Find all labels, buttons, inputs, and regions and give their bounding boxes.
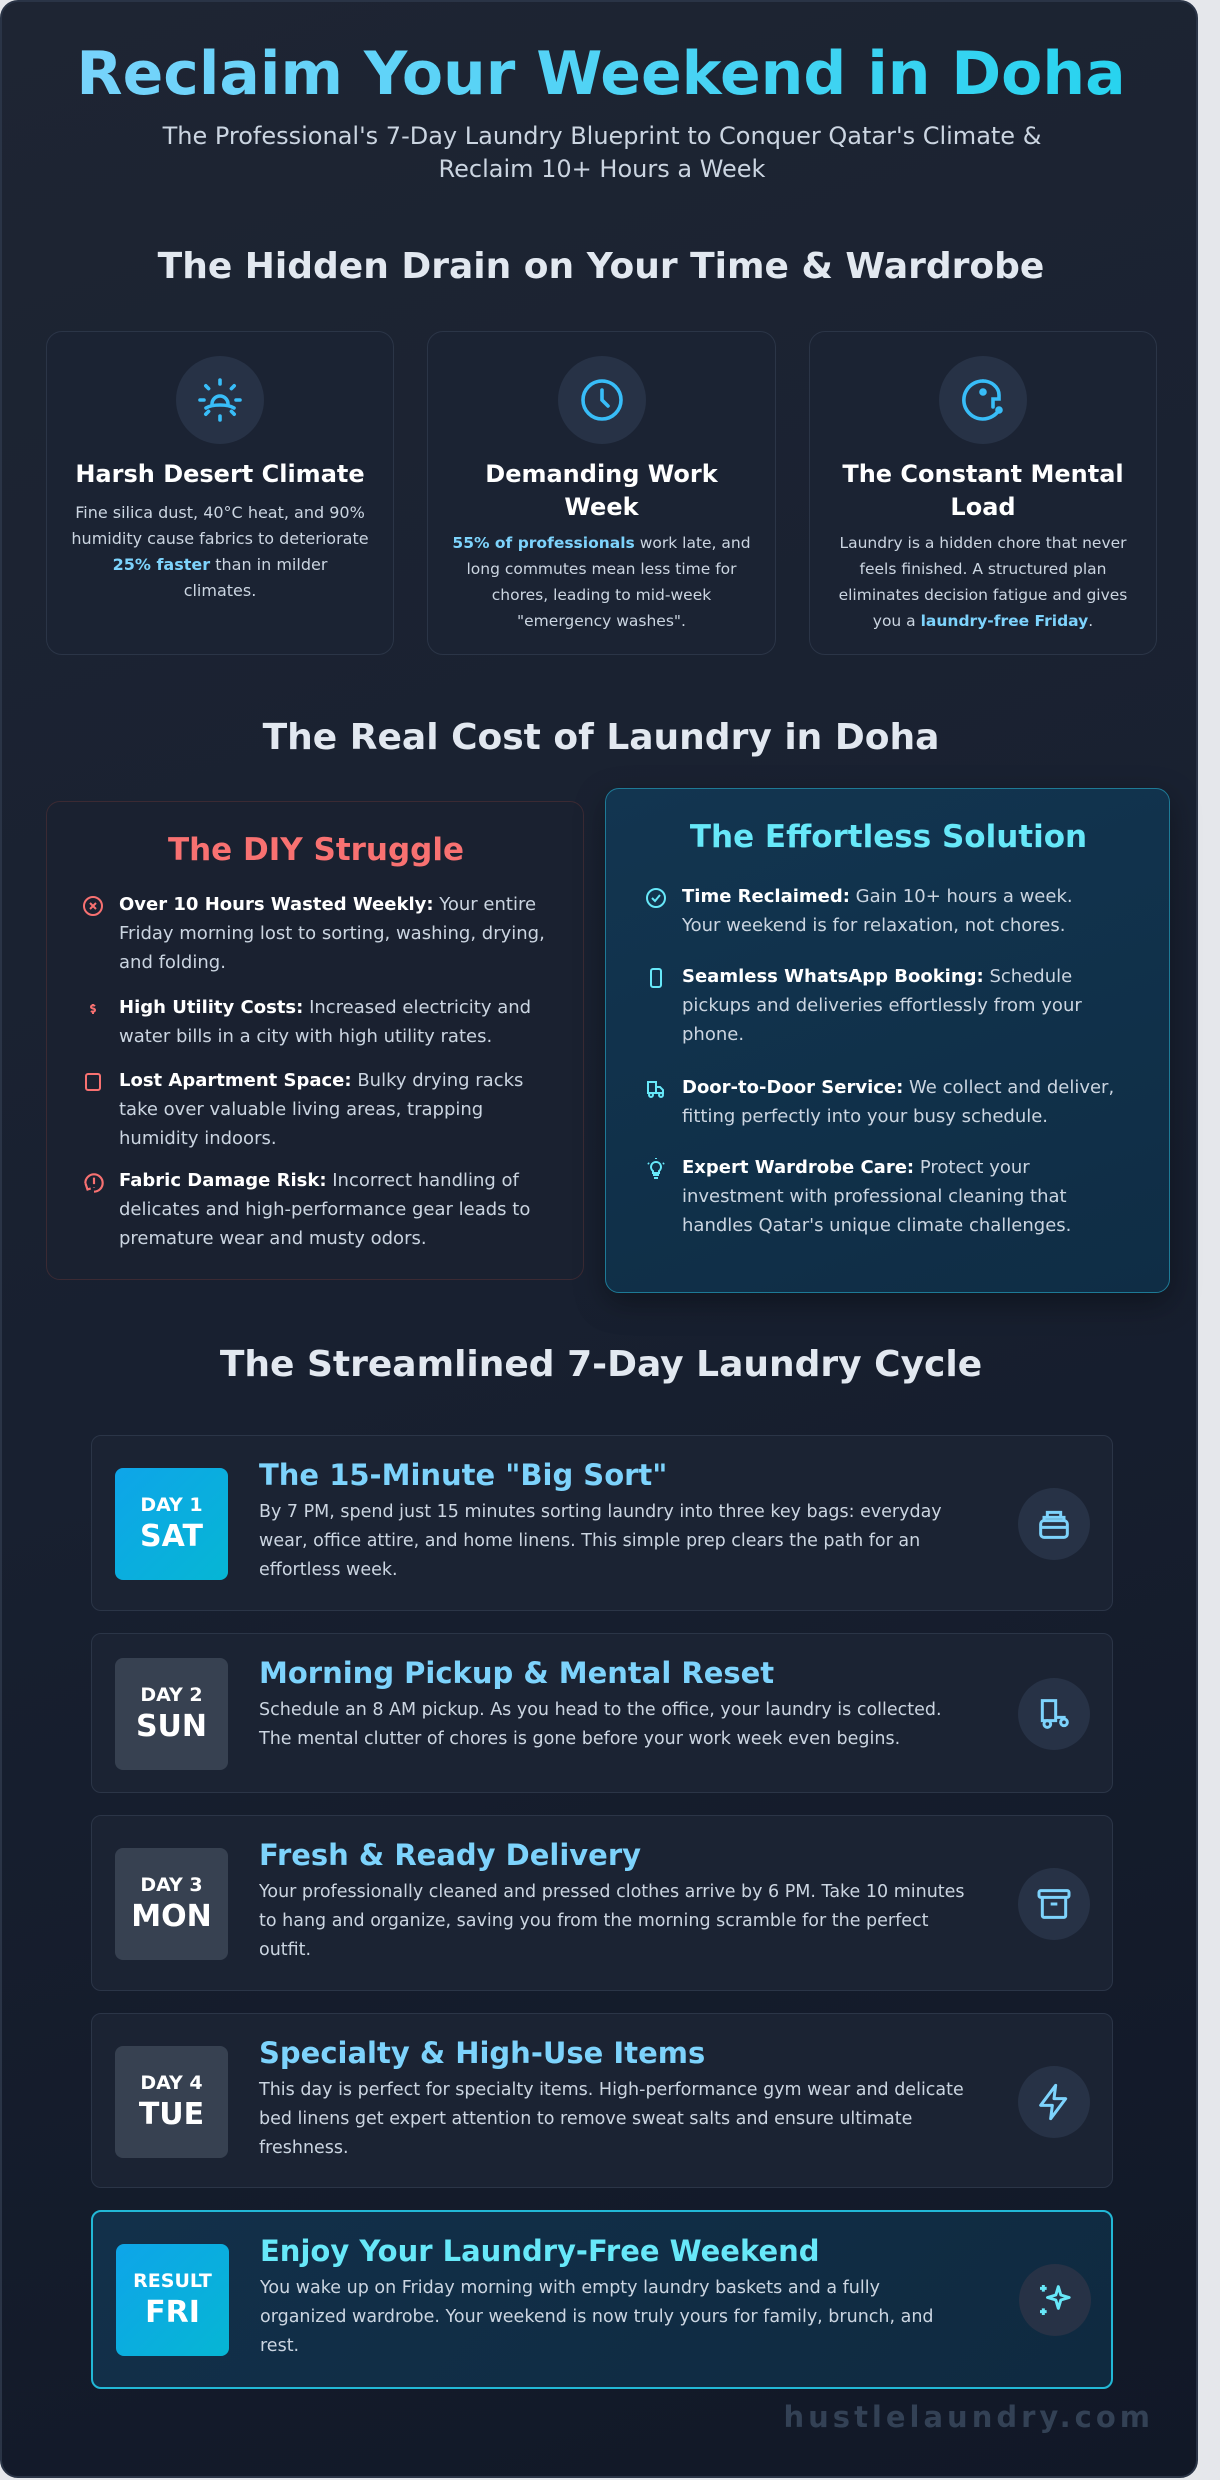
panel: effortless solution [605,788,1170,1293]
badge: SAT [140,1519,203,1554]
heading: hidden drain: The Hidden Drain on Your Time & Wardrobe [158,246,1044,287]
card: demanding work week [427,331,776,655]
day text: Your professionally cleaned and pressed clothes arrive by 6 PM. Take 10 minutes to hang and organize, saving you from the morning scramble for the perfect outfit. [259,1882,965,1960]
day title: The 15-Minute "Big Sort" [259,1458,667,1492]
card text: Fine silica dust, 40°C heat, and 90% humidity cause fabrics to deteriorate 25% faster than in milder [71,503,369,574]
item: whatsapp booking: Seamless WhatsApp Booking: Schedule pickups and deliveries effortlessly from your phone. [682,966,1082,1045]
badge [115,2046,228,2158]
card: mental load [809,331,1157,655]
icon: sparkles [1019,2264,1091,2336]
icon: archive [1018,1868,1090,1940]
icon: truck [1018,1678,1090,1750]
day card: day 4 [91,2013,1113,2188]
item: lost space: Lost Apartment Space: Bulky drying racks take over valuable living areas, trapping humidity indoors. [119,1070,523,1149]
day text: By 7 PM, spend just 15 minutes sorting laundry into three key bags: everyday wear, office attire, and home linens. This simple prep clears the path for an effortless week. [259,1502,942,1580]
day text: You wake up on Friday morning with empty laundry baskets and a fully organized wardrobe. Your weekend is now truly yours for family, brunch, and rest. [260,2278,934,2356]
item: utility costs: High Utility Costs: Increased electricity and water bills in a city with high utility rates. [119,997,531,1047]
item: time reclaimed: Time Reclaimed: Gain 10+ hours a week. Your weekend is for relaxation, not chores. [682,886,1073,936]
badge [115,1658,228,1770]
badge: TUE [139,2097,204,2132]
icon: brain [939,356,1027,444]
badge: DAY 1 [140,1494,203,1516]
day title: Enjoy Your Laundry-Free Weekend [260,2234,820,2268]
badge: RESULT [133,2270,212,2292]
panel: DIY struggle [46,801,584,1280]
day text: This day is perfect for specialty items. High-performance gym wear and delicate bed linens get expert attention to remove sweat salts and ensure ultimate freshness. [259,2080,964,2158]
badge: DAY 2 [140,1684,203,1706]
heading: real cost: The Real Cost of Laundry in Doha [263,717,939,758]
badge [115,1468,228,1580]
icon: clock [558,356,646,444]
card text: Laundry is a hidden chore that never feels finished. A structured plan eliminates decision fatigue and gives you a laundry-free Friday. [839,534,1127,630]
heading: 7-day cycle: The Streamlined 7-Day Laundry Cycle [220,1344,982,1385]
card title: Harsh Desert Climate [75,460,365,488]
DIY title: The DIY Struggle [168,832,464,868]
icon: stack [1018,1488,1090,1560]
day card: day 1 [91,1435,1113,1611]
item: wardrobe care: Expert Wardrobe Care: Protect your investment with professional cleaning that handles Qatar's unique climate challenges. [682,1157,1071,1236]
day card: result friday [91,2210,1113,2389]
icon: sun [176,356,264,444]
icon: bolt [1018,2066,1090,2138]
card text: 55% of professionals work late, and long commutes mean less time for chores, leading to mid-week "emergency washes". [452,534,751,630]
badge: DAY 4 [140,2072,203,2094]
day title: Specialty & High-Use Items [259,2036,705,2070]
card text: climates. [184,581,256,600]
card title: Demanding Work Week [485,460,718,521]
badge: SUN [136,1709,207,1744]
badge: MON [131,1899,212,1934]
subtitle: The Professional's 7-Day Laundry Blueprint to Conquer Qatar's Climate & Reclaim 10+ Hours a Week [163,122,1041,183]
day card: day 2 [91,1633,1113,1793]
footer brand: hustlelaundry.com [784,2400,1154,2434]
item: hours wasted: Over 10 Hours Wasted Weekly: Your entire Friday morning lost to sorting, washing, drying, and folding. [119,894,545,973]
day text: Schedule an 8 AM pickup. As you head to the office, your laundry is collected. The mental clutter of chores is gone before your work week even begins. [259,1700,942,1749]
card title: The Constant Mental Load [842,460,1124,521]
badge [116,2244,229,2356]
day card: day 3 [91,1815,1113,1991]
day title: Fresh & Ready Delivery [259,1838,641,1872]
title: Reclaim Your Weekend in Doha [76,39,1126,109]
badge [115,1848,228,1960]
solution title: The Effortless Solution [690,819,1087,855]
card: harsh desert climate [46,331,394,655]
item: fabric damage: Fabric Damage Risk: Incorrect handling of delicates and high-performance gear leads to premature wear and musty odors. [119,1170,530,1249]
badge: FRI [145,2295,200,2330]
badge: DAY 3 [140,1874,203,1896]
day title: Morning Pickup & Mental Reset [259,1656,774,1690]
item: door-to-door: Door-to-Door Service: We collect and deliver, fitting perfectly into your busy schedule. [682,1077,1114,1127]
